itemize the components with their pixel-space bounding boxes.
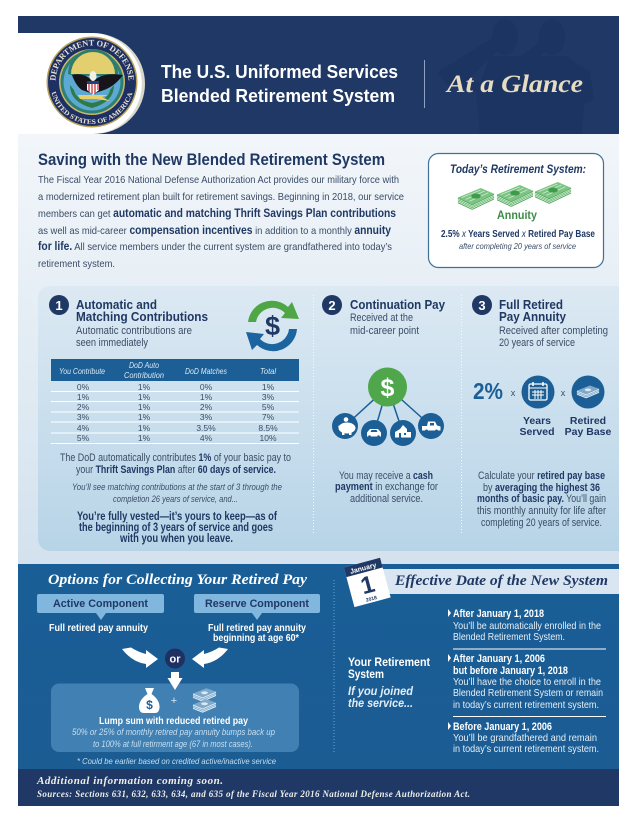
panel: full retired pay annuity (472, 295, 612, 529)
option: after january 1 2018: After January 1, 2018 (453, 608, 544, 620)
retired pay base label: Retired (570, 415, 606, 427)
text: calculate retired pay base (477, 470, 606, 529)
icon: truck (418, 413, 444, 439)
active component tab: Active Component (53, 598, 148, 610)
icon: house (390, 420, 416, 446)
contributions table: 1% (77, 392, 90, 402)
contributions table: 1% (200, 392, 213, 402)
effective date banner: Effective Date of the New System (394, 573, 608, 589)
text: cash payment: You may receive a cash (339, 470, 433, 482)
your retirement system label: Your Retirement (348, 657, 430, 669)
annuity note: after completing 20 years of service (459, 241, 576, 251)
number 3 badge (472, 295, 492, 315)
sources line: Sources: Sections 631, 632, 633, 634, and 635 of the Fiscal Year 2016 National Defense Authorization Act. (37, 789, 470, 799)
icon: money stack (572, 376, 604, 408)
section 3 heading (499, 297, 567, 324)
text: calculate retired pay base: months of basic pay. You’ll gain (477, 493, 606, 505)
number 2 badge (322, 295, 342, 315)
contributions table: 3.5% (196, 423, 216, 433)
annuity formula: 2.5% x Years Served x Retired Pay Base (441, 229, 595, 240)
your retirement system label: If you joined (348, 686, 414, 698)
panel: effective date of the new system (344, 558, 619, 755)
intro paragraph: retirement system. (38, 258, 115, 270)
arrow: left into or (122, 648, 158, 668)
icon: calendar january 1 2018 (344, 558, 391, 607)
retired pay base label (565, 415, 612, 438)
text: dod contribution: The DoD automatically contributes 1% of your basic pay to (60, 452, 291, 464)
contributions table: Total (260, 366, 277, 376)
option: after january 1 2006 but before 2018 (448, 653, 603, 711)
icon: piggy bank (332, 413, 358, 439)
years served label: Served (519, 426, 555, 438)
icon: department of defense seal (46, 36, 138, 128)
section 1 heading: Automatic and (76, 297, 157, 312)
contributions table: 2% (77, 402, 90, 412)
icon: white money stacks (193, 688, 216, 713)
text: matching note: You’ll see matching contributions at the start of 3 through the (72, 482, 282, 492)
effective date banner (383, 569, 619, 594)
option: before january 1 2006: You’ll be grandfathered and remain (453, 732, 597, 744)
section 3 subheading: Received after completing (499, 325, 608, 337)
icon: department of defense seal: UNITED STATES OF AMERICA (52, 91, 132, 124)
your retirement system label: System (348, 669, 384, 681)
contributions table: 1% (138, 402, 151, 412)
contributions table: 10% (259, 433, 277, 443)
option: before january 1 2006: in today’s current retirement system. (453, 743, 599, 755)
section 3 subheading: 20 years of service (499, 337, 575, 349)
arrow: right into or (192, 648, 228, 668)
formula: x (511, 388, 516, 398)
formula (473, 376, 612, 438)
soldier silhouettes (438, 19, 594, 134)
diagram: cash payment uses (332, 368, 444, 446)
contributions table: 1% (138, 433, 151, 443)
contributions table: 3% (200, 412, 213, 422)
heading: saving with the new blended retirement system: Saving with the New Blended Retirement System (38, 150, 385, 169)
number 1 badge (49, 295, 69, 315)
text: cash payment: additional service. (350, 493, 423, 505)
contributions table: DoD Auto (129, 360, 159, 370)
lump sum detail: 50% or 25% of monthly retired pay annuity bumps back up (72, 727, 275, 737)
icon: green dollar circle: $ (381, 374, 395, 402)
contributions table (51, 359, 299, 444)
intro paragraph: The Fiscal Year 2016 National Defense Authorization Act provides our military force with (38, 174, 399, 186)
contributions table: 3% (262, 392, 275, 402)
text: calculate retired pay base: completing 20 years of service. (481, 517, 602, 529)
section 1 heading: Matching Contributions (76, 309, 208, 324)
section 3 heading: Full Retired (499, 297, 563, 312)
section 2 subheading (350, 312, 419, 337)
additional information line: Additional information coming soon. (36, 775, 223, 787)
contributions table: 1% (138, 412, 151, 422)
years served label (519, 415, 555, 438)
or badge: or (170, 654, 181, 666)
contributions table: DoD Matches (185, 366, 228, 376)
contributions table: 0% (77, 382, 90, 392)
option: after january 1 2006 but before 2018: in today’s current retirement system. (453, 699, 599, 711)
lump sum detail (72, 727, 275, 749)
intro paragraph: a modernized retirement plan built for retirement savings. Beginning in 2018, our service (38, 191, 404, 203)
active annuity text: Full retired pay annuity (49, 622, 148, 634)
icon: calendar january 1 2018: 2018 (365, 595, 378, 604)
text: calculate retired pay base: this monthly annuity for life after (477, 505, 606, 517)
option: after january 1 2018: You’ll be automatically enrolled in the (453, 620, 601, 632)
lump sum box (51, 684, 299, 752)
text: calculate retired pay base: by averaging the highest 36 (483, 482, 600, 494)
icon: calendar january 1 2018: 1 (358, 571, 378, 600)
contributions table: 3% (77, 412, 90, 422)
text: dod contribution (60, 452, 291, 476)
contributions table: 1% (262, 382, 275, 392)
option: after january 1 2006 but before 2018: Blended Retirement System or remain (453, 687, 603, 699)
intro paragraph: as well as mid-career compensation incentives in addition to a monthly annuity (38, 225, 392, 237)
reserve component tab: Reserve Component (205, 598, 309, 610)
intro paragraph (38, 174, 404, 270)
option: after january 1 2018: Blended Retirement System. (453, 631, 565, 643)
panel: options for collecting your retired pay (37, 572, 320, 766)
contributions table: You Contribute (59, 366, 105, 376)
years served label: Years (523, 415, 551, 427)
panel: automatic and matching contributions (49, 295, 299, 545)
contributions table: 1% (138, 423, 151, 433)
icon: department of defense seal: DEPARTMENT OF DEFENSE (50, 40, 134, 81)
option: before january 1 2006 (448, 721, 599, 755)
page background panel (18, 134, 619, 564)
reserve annuity text: Full retired pay annuity (208, 622, 306, 634)
text: cash payment: payment in exchange for (335, 481, 438, 493)
arrow: down from or (168, 672, 182, 690)
contributions table: 5% (262, 402, 275, 412)
icon: circular arrows with dollar: $ (265, 311, 280, 341)
title (161, 62, 398, 106)
plus sign: + (171, 695, 177, 707)
text: dod contribution: your Thrift Savings Plan after 60 days of service. (76, 464, 276, 476)
your retirement system label: the service... (348, 698, 413, 710)
option: after january 1 2018 (448, 608, 601, 643)
number 3 badge: 3 (478, 298, 486, 313)
title: Blended Retirement System (161, 86, 395, 106)
your retirement system label (348, 657, 430, 710)
formula: x (561, 388, 566, 398)
contributions table: 8.5% (258, 423, 278, 433)
option: after january 1 2006 but before 2018: but before January 1, 2018 (453, 665, 568, 677)
contributions table: 2% (200, 402, 213, 412)
section 2 heading: Continuation Pay (350, 297, 446, 312)
callout heading: Today’s Retirement System: (450, 164, 586, 176)
reserve annuity text: beginning at age 60* (213, 632, 300, 644)
or badge (165, 648, 185, 668)
contributions table: Contribution (124, 370, 164, 380)
icon: money bag (139, 688, 160, 713)
panel: three components background (38, 286, 619, 551)
contributions table: 5% (77, 433, 90, 443)
panel: blue lower section (18, 564, 619, 769)
footnote: * Could be earlier based on credited active/inactive service (77, 756, 276, 766)
seal backing (18, 33, 145, 134)
section 1 heading (76, 297, 208, 324)
section 2 subheading: Received at the (350, 312, 413, 324)
section 3 subheading (499, 325, 608, 349)
intro paragraph: members can get automatic and matching Thrift Savings Plan contributions (38, 208, 396, 220)
text: vesting: You’re fully vested—it’s yours to keep—as of (77, 511, 277, 523)
lump sum detail: to 100% at full retirment age (67 in most cases). (93, 739, 253, 749)
section 3 heading: Pay Annuity (499, 309, 567, 324)
annuity label: Annuity (497, 208, 537, 222)
icon: car (361, 420, 387, 446)
contributions table: 4% (77, 423, 90, 433)
icon: calendar (522, 376, 554, 408)
icon: calendar january 1 2018: January (349, 562, 377, 576)
text: vesting (77, 511, 277, 545)
option: after january 1 2006 but before 2018: You’ll have the choice to enroll in the (453, 676, 601, 688)
contributions table: 7% (262, 412, 275, 422)
header banner (18, 16, 619, 134)
contributions table: 4% (200, 433, 213, 443)
section 2 subheading: mid-career point (350, 325, 419, 337)
formula: 2% (473, 378, 503, 404)
icon: money bag: $ (146, 698, 153, 712)
retired pay base label: Pay Base (565, 426, 612, 438)
icon: green money stacks (458, 182, 571, 210)
active component tab (37, 594, 164, 620)
number 2 badge: 2 (328, 298, 336, 313)
contributions table: 1% (138, 392, 151, 402)
section 1 subheading: Automatic contributions are (76, 325, 192, 337)
text: matching note (72, 482, 282, 504)
text: vesting: the beginning of 3 years of service and goes (79, 522, 273, 534)
reserve component tab (194, 594, 320, 620)
text: vesting: with you when you leave. (119, 533, 233, 545)
options heading: Options for Collecting Your Retired Pay (48, 572, 307, 588)
at a glance: At a Glance (445, 71, 583, 98)
reserve annuity text (208, 622, 306, 644)
lump sum heading: Lump sum with reduced retired pay (99, 715, 248, 727)
footer (18, 769, 619, 806)
contributions table: 1% (138, 382, 151, 392)
text: matching note: completion 26 years of service, and... (113, 494, 238, 504)
text: calculate retired pay base: Calculate your retired pay base (478, 470, 605, 482)
callout: today's retirement system (428, 154, 604, 268)
icon: circular arrows with dollar (246, 301, 299, 351)
text: cash payment (335, 470, 438, 505)
intro paragraph: for life. All service members under the current system are grandfathered into today’s (38, 241, 392, 253)
option: before january 1 2006: Before January 1, 2006 (453, 721, 552, 733)
contributions table: 0% (200, 382, 213, 392)
section 1 subheading (76, 325, 192, 349)
option: after january 1 2006 but before 2018: After January 1, 2006 (453, 653, 545, 665)
section 1 subheading: seen immediately (76, 337, 148, 349)
panel: continuation pay (322, 295, 446, 505)
number 1 badge: 1 (55, 298, 63, 313)
title: The U.S. Uniformed Services (161, 62, 398, 82)
